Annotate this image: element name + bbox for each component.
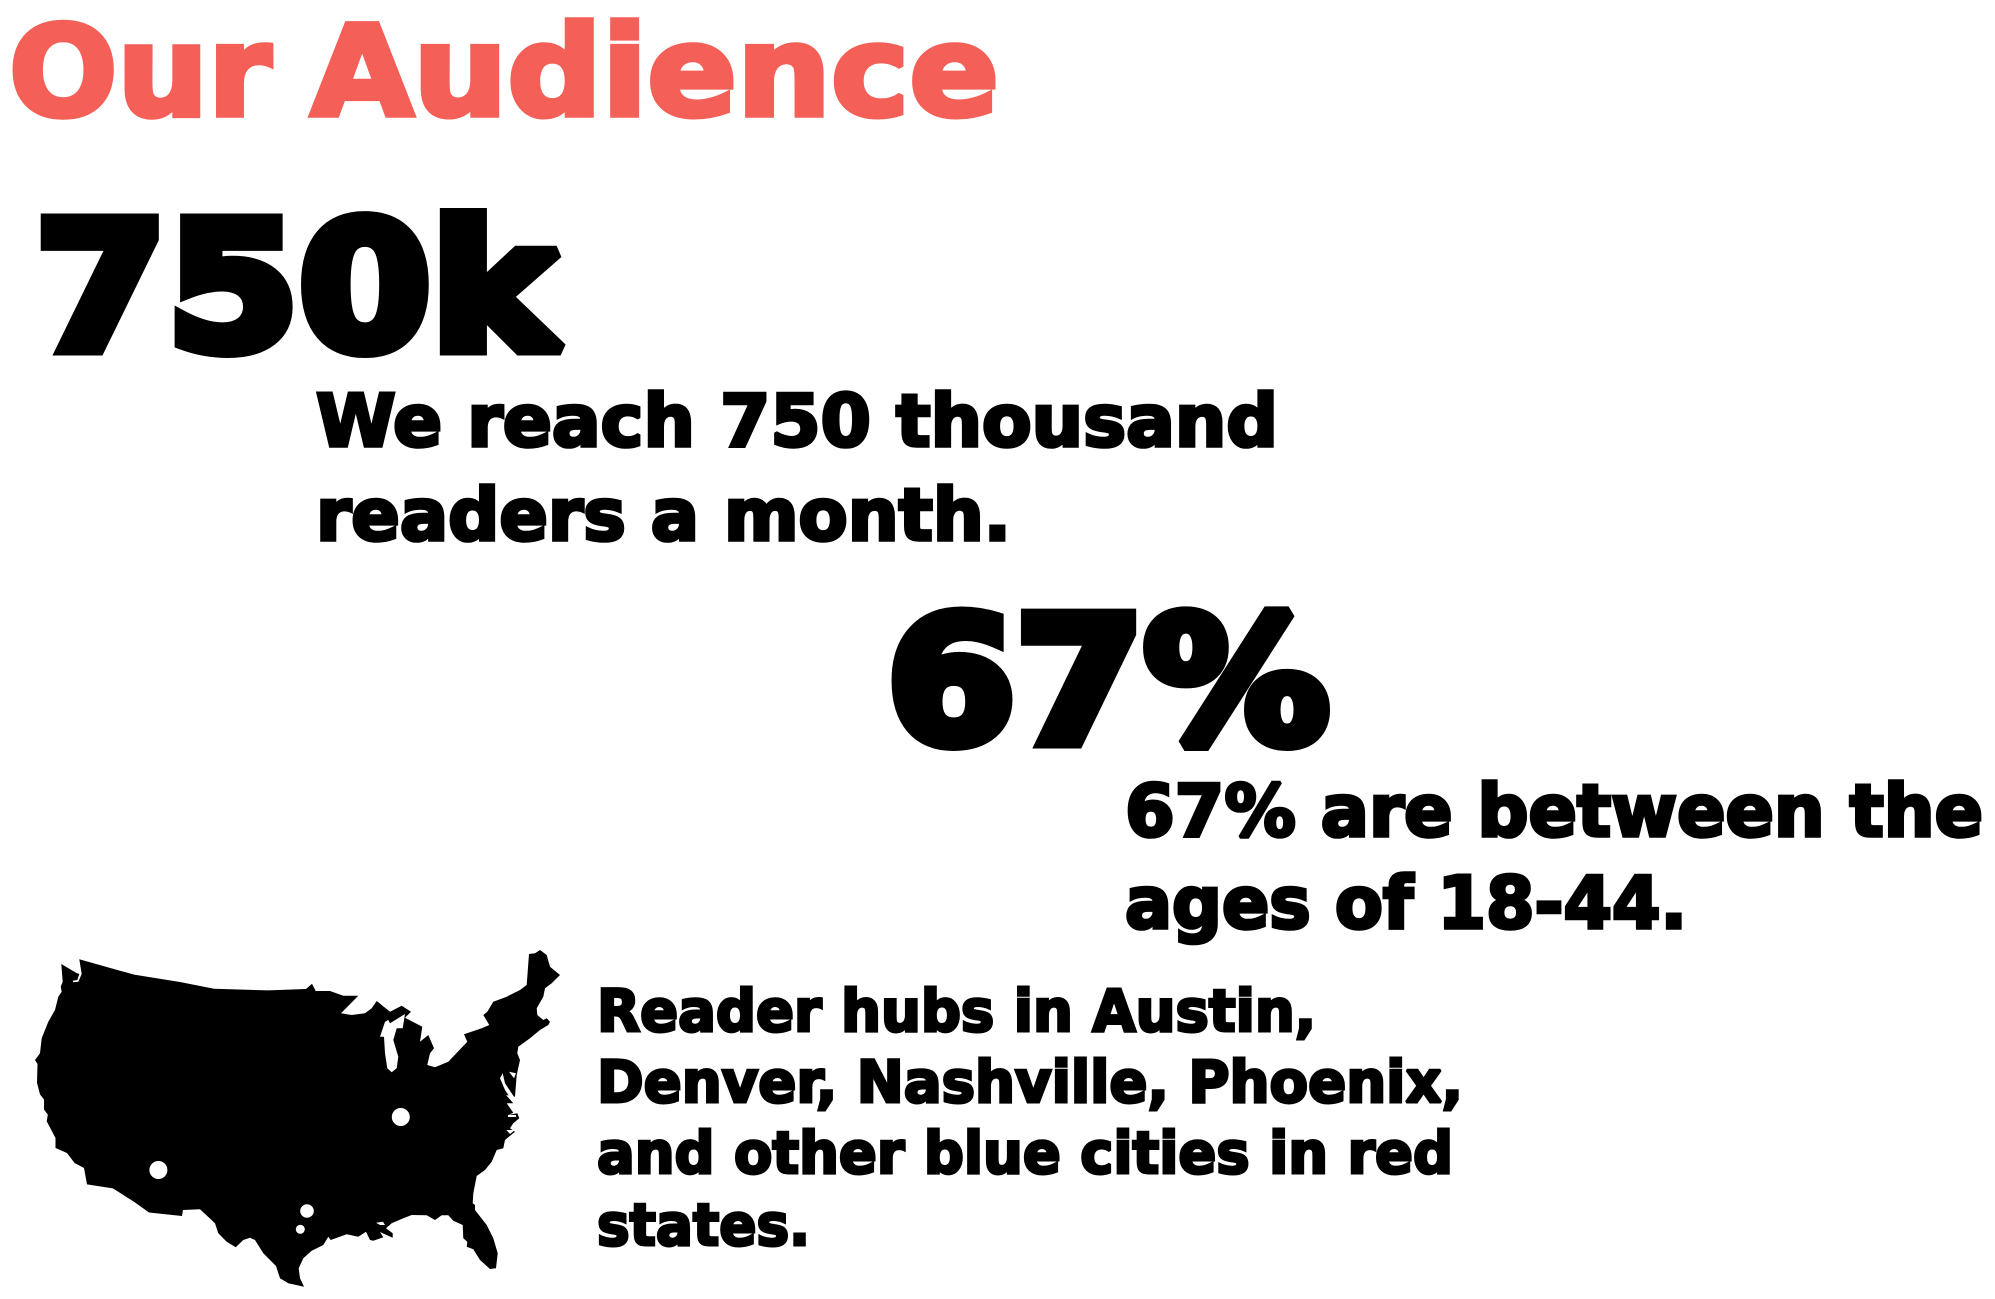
big number: 67%: 67% [887, 581, 1329, 784]
big number: 750k: 750k [35, 185, 562, 391]
text: age description [1125, 769, 1983, 945]
text: reach description: We reach 750 thousand [316, 379, 1278, 463]
hub marker: Denver area [300, 1204, 314, 1218]
hub marker: Phoenix [149, 1161, 167, 1179]
text: reader hubs description [597, 977, 1463, 1259]
hub marker: Nashville [392, 1108, 410, 1126]
map: United States silhouette with reader hubs [35, 950, 560, 1287]
stat block: 67% age range [887, 581, 1983, 945]
text: reach description: readers a month. [316, 473, 1011, 557]
title: Audience [311, 0, 999, 145]
text: age description: 67% are between the [1125, 769, 1983, 853]
stat block: 750k readers [35, 185, 1278, 557]
title [9, 0, 999, 145]
text: reader hubs description: Reader hubs in Austin, [597, 977, 1316, 1045]
hub marker: Austin [296, 1225, 305, 1234]
text: reader hubs description: states. [597, 1191, 810, 1259]
text: reach description [316, 379, 1278, 557]
map outline [35, 950, 560, 1287]
text: reader hubs description: and other blue cities in red [597, 1119, 1453, 1187]
title: Our [9, 0, 271, 145]
lake michigan and coastal water [376, 1014, 534, 1225]
text: reader hubs description: Denver, Nashville, Phoenix, [597, 1048, 1463, 1116]
text: age description: ages of 18-44. [1125, 861, 1687, 945]
